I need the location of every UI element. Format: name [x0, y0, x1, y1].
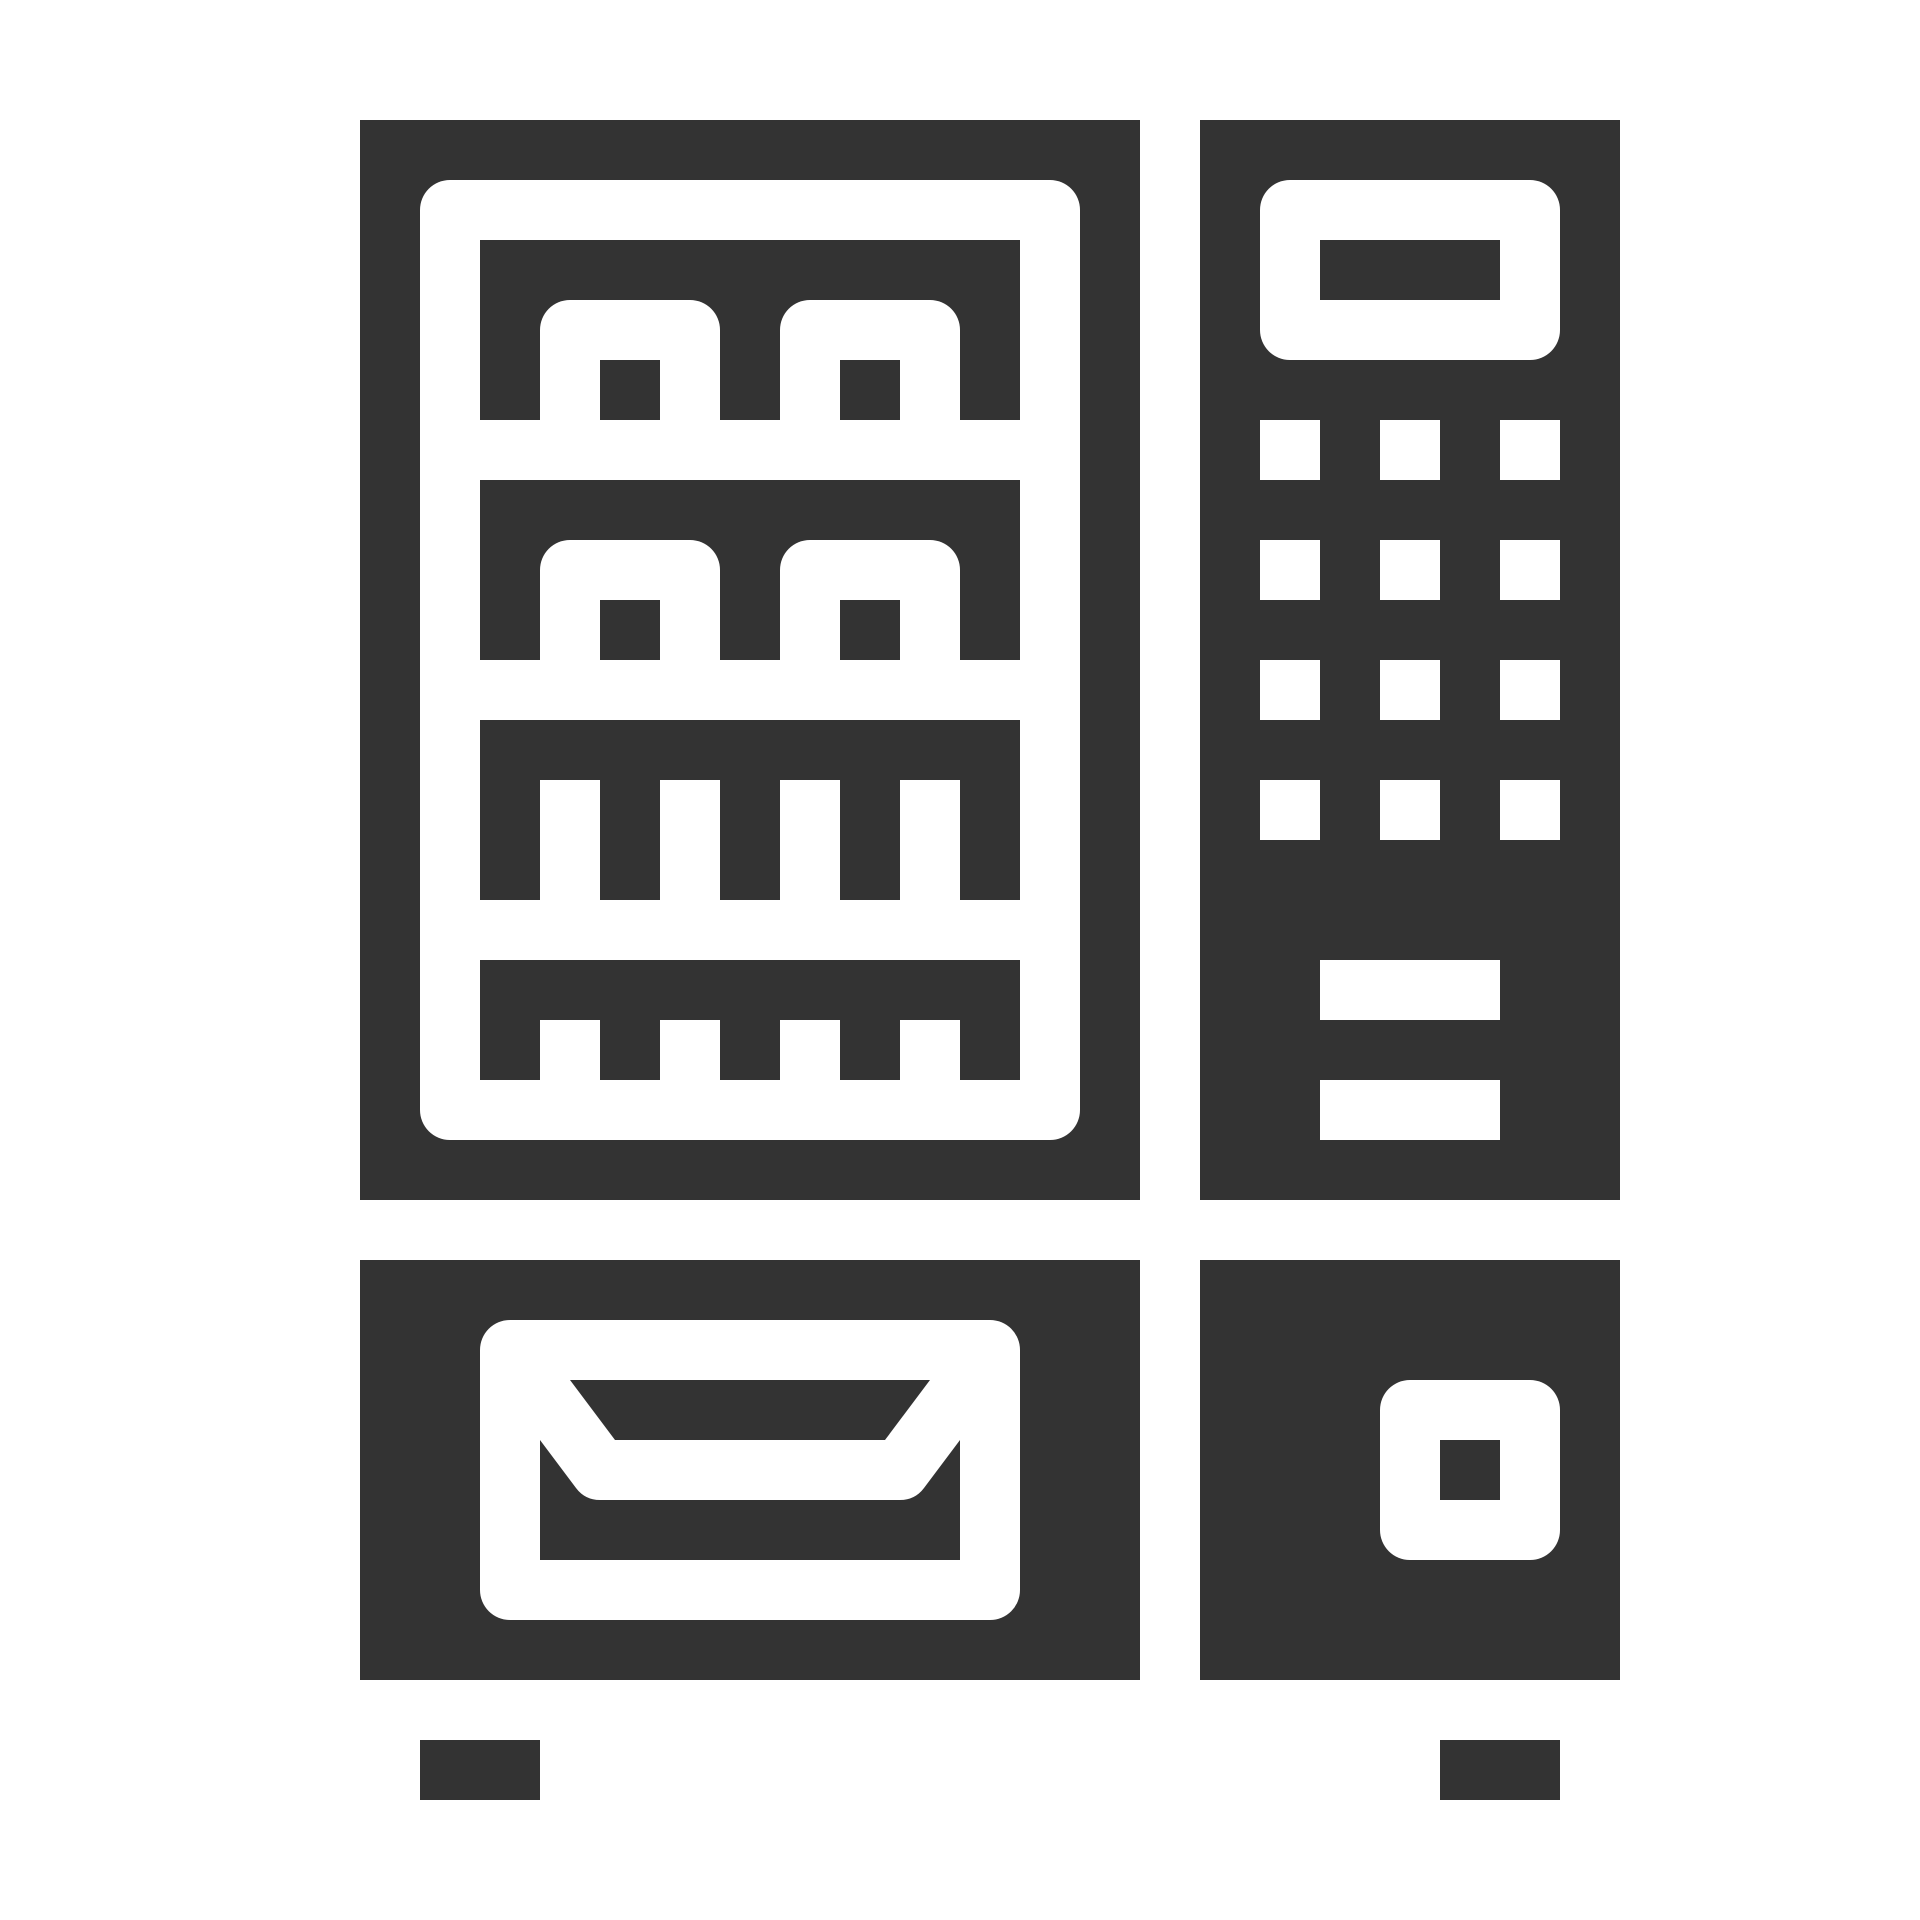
left foot — [420, 1740, 540, 1800]
payment slots — [1320, 960, 1500, 1140]
right foot — [1440, 1740, 1560, 1800]
screen — [1260, 180, 1560, 360]
panel: control column — [1200, 120, 1620, 1200]
door lower tray — [540, 1440, 960, 1560]
keypad — [1260, 420, 1560, 840]
panel: product display cabinet — [360, 120, 1140, 1200]
panel: pickup compartment — [360, 1260, 1140, 1680]
panel: coin return — [1200, 1260, 1620, 1680]
door flap upper trapezoid — [570, 1380, 930, 1440]
shelf 1 with two products — [480, 240, 1020, 420]
shelf 3 with four tall products — [480, 720, 1020, 900]
coin return button — [1380, 1380, 1560, 1560]
display window — [420, 180, 1080, 1140]
shelf 2 with two products — [480, 480, 1020, 660]
pickup door — [480, 1320, 1020, 1620]
shelf 4 with four short products — [480, 960, 1020, 1080]
